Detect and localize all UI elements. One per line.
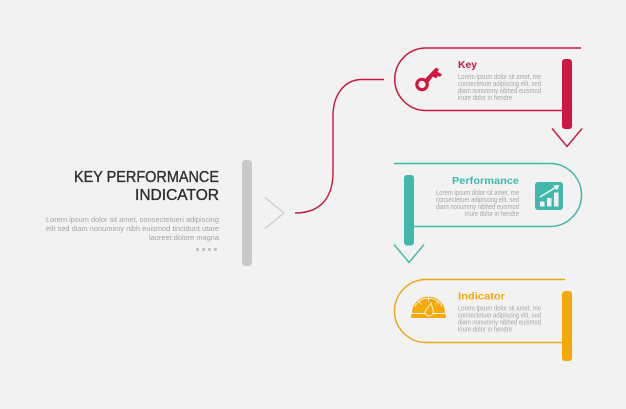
title (74, 169, 219, 204)
body text: indicator: iriure dolor in hendre (458, 326, 512, 333)
intro text: laoreet dolore magna (149, 233, 220, 242)
icon: gauge (411, 296, 446, 318)
body text: indicator (458, 305, 541, 333)
body text: key: diam nonummy nibhed euismod (458, 88, 541, 95)
body text: indicator: Lorem ipsum dolor sit amet, me (458, 305, 541, 312)
body text: performance: iriure dolor in hendre (465, 211, 519, 218)
arrow: key down (552, 128, 582, 146)
title: KEY PERFORMANCE (74, 169, 219, 186)
panel: key (395, 48, 582, 146)
icon: growth chart (535, 182, 563, 210)
body text: performance: consectetuer adipiscing elit, sed (436, 197, 519, 204)
arrow: performance down (394, 244, 424, 262)
body text: indicator: diam nonummy nibhed euismod (458, 319, 541, 326)
panel: indicator (395, 280, 572, 361)
body text: key: consectetuer adipiscing elit, sed (458, 81, 541, 88)
vertical grey bar (242, 160, 252, 266)
connector line (295, 80, 384, 213)
heading: performance: Performance (452, 175, 519, 187)
body text: performance: diam nonummy nibhed euismod (436, 204, 519, 211)
heading: key: Key (458, 59, 477, 71)
grey chevron arrow (265, 198, 284, 228)
intro text: Lorem ipsum dolor sit amet, consectetueri adipiscing (46, 215, 219, 224)
body text: key: iriure dolor in hendre (458, 95, 512, 102)
body text: performance: Lorem ipsum dolor sit amet, me (436, 190, 519, 197)
intro text: elit sed diam nonumimy nibh euismod tincidunt utare (46, 224, 219, 233)
pagination dots (196, 248, 217, 251)
title: INDICATOR (135, 187, 219, 204)
intro text (46, 215, 220, 242)
heading: indicator: Indicator (458, 290, 505, 302)
body text: performance (436, 190, 519, 218)
panel: performance (394, 164, 582, 262)
body text: key (458, 74, 541, 102)
body text: key: Lorem ipsum dolor sit amet, me (458, 74, 541, 81)
icon: key (417, 68, 442, 90)
body text: indicator: consectetuer adipiscing elit, sed (458, 312, 541, 319)
